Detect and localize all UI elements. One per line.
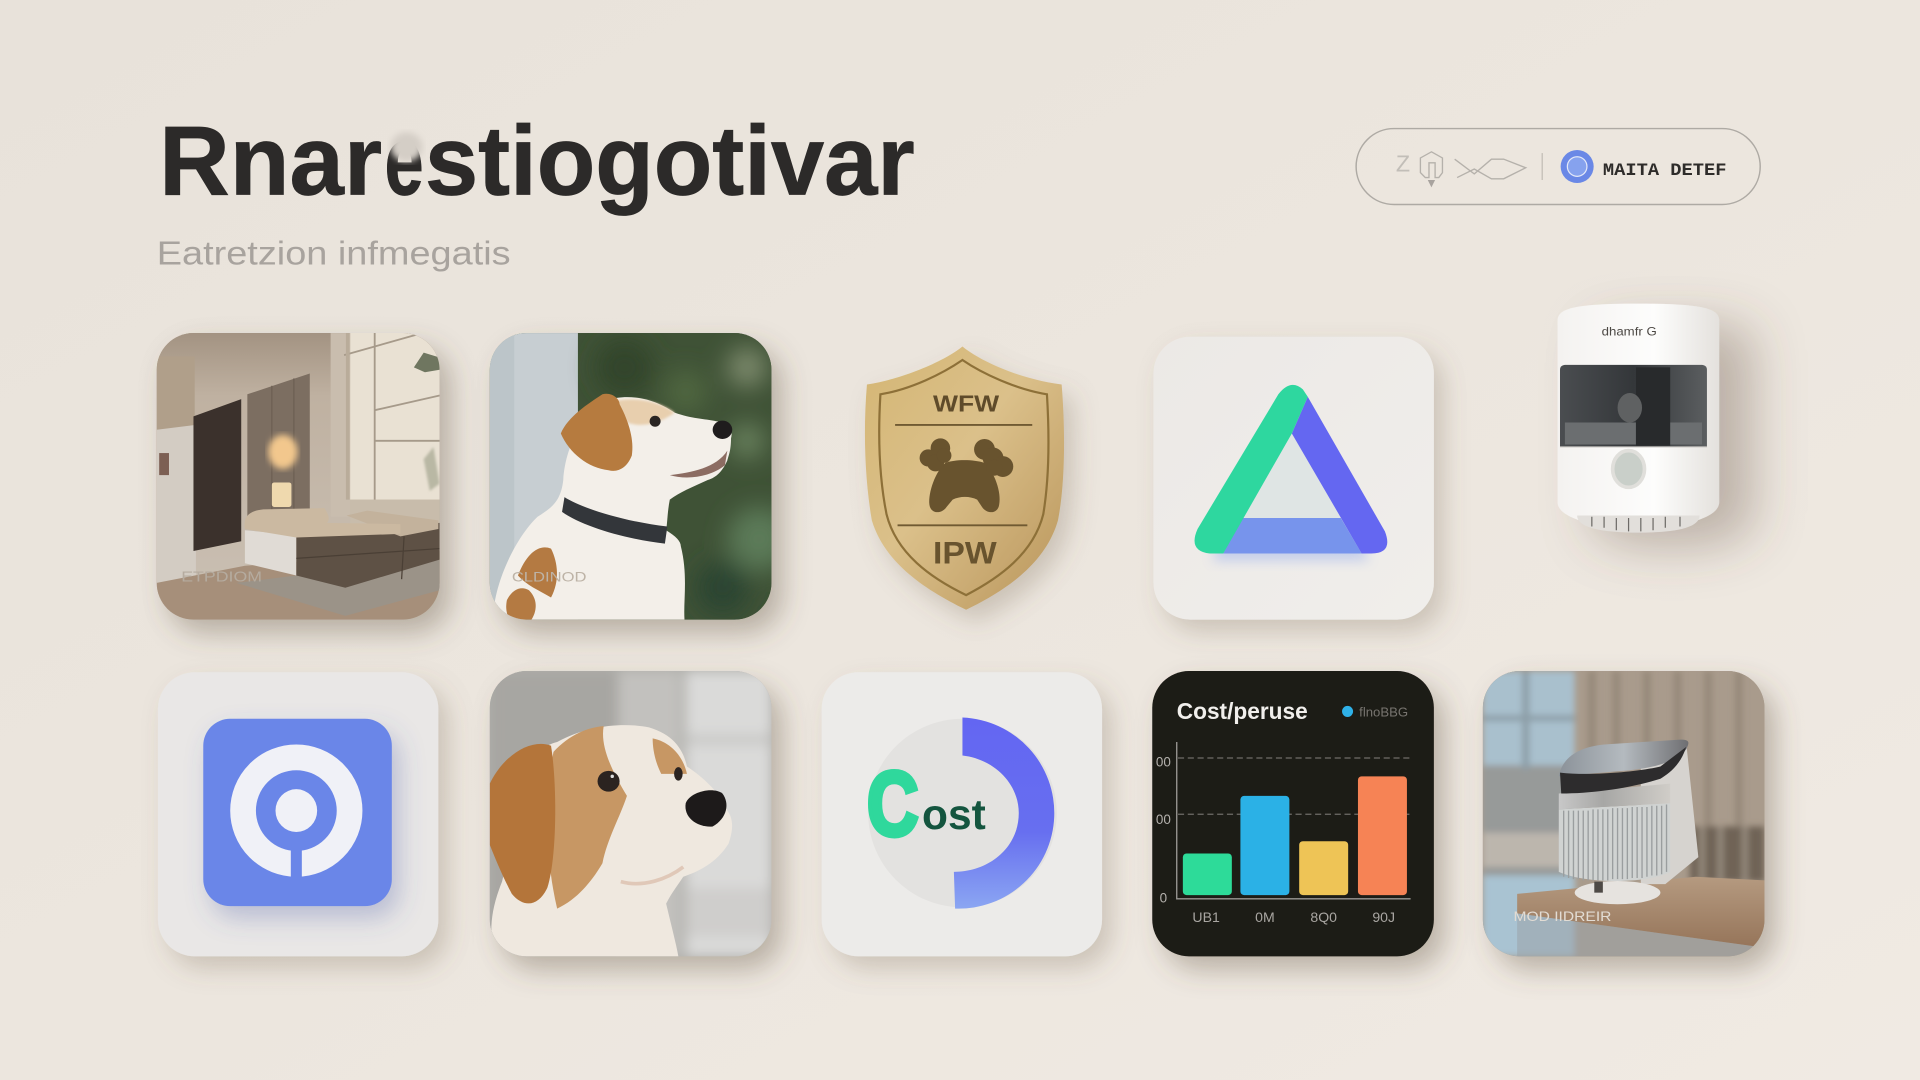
badge bottom text: IPW <box>933 534 998 570</box>
floor <box>157 551 441 620</box>
icon: faint line glyphs <box>1396 150 1526 187</box>
purifier back body <box>1641 742 1698 884</box>
cost wordmark <box>867 754 986 855</box>
y axis labels <box>1156 755 1171 905</box>
y axis labels: 0 <box>1160 890 1167 905</box>
panel: cost donut card <box>822 672 1102 956</box>
dog silhouette <box>491 725 732 956</box>
dog body <box>493 397 732 620</box>
speaker grill <box>1577 516 1700 533</box>
window <box>350 333 440 500</box>
title: e <box>384 106 424 216</box>
purifier dark band <box>1560 747 1686 793</box>
purifier glass cylinder <box>1559 803 1670 881</box>
photo caption: ETPDIOM <box>181 570 262 586</box>
bars <box>1183 776 1407 895</box>
cost wordmark: ost <box>922 791 986 839</box>
panel: white motion sensor camera <box>1558 304 1719 533</box>
badge top text: WFW <box>933 390 999 416</box>
y axis labels: 00 <box>1156 755 1171 770</box>
chart axes <box>1177 742 1411 899</box>
rug <box>238 560 440 616</box>
panel: interior photo <box>157 328 441 620</box>
chart title: Cost/peruse <box>1177 698 1308 724</box>
ear <box>561 394 632 471</box>
status pill <box>1356 129 1760 204</box>
ottoman <box>245 530 296 576</box>
x axis labels <box>1192 909 1395 925</box>
pill label: MAITA DETEF <box>1603 161 1727 181</box>
icon: triangle logo <box>1195 385 1387 561</box>
subtitle: Eatretzion infmegatis <box>157 235 511 272</box>
panel: dog looking up photo <box>490 333 791 620</box>
photo caption: MOD IIDREIR <box>1513 908 1611 924</box>
panel: air purifier photo <box>1483 671 1764 956</box>
title: stiogotivar <box>425 106 915 216</box>
dark wall panel <box>193 399 241 551</box>
legend: flnoBBG <box>1359 704 1408 719</box>
photo caption: CLDINOD <box>512 569 587 585</box>
panel: cost bar chart <box>1152 671 1434 956</box>
collar <box>562 497 667 544</box>
panel: blue location app card <box>158 672 438 956</box>
sensor lens <box>1613 451 1644 487</box>
cost wordmark: C <box>867 754 918 855</box>
title: Rnar <box>159 106 382 216</box>
donut chart <box>868 718 1057 909</box>
icon: faint line glyphs: Z <box>1396 150 1410 176</box>
x axis labels: UB1 <box>1192 909 1220 925</box>
title <box>159 106 915 216</box>
x axis labels: 0M <box>1255 909 1275 925</box>
icon: paw <box>920 438 1013 512</box>
panel: gold shield badge <box>865 347 1064 610</box>
icon: blue app tile <box>203 719 392 906</box>
tan face <box>547 726 627 909</box>
x axis labels: 8Q0 <box>1310 909 1337 925</box>
icon: blue status dot <box>1561 150 1594 183</box>
panel: triangle logo card <box>1153 337 1434 620</box>
table <box>1517 877 1764 947</box>
purifier dome <box>1559 740 1688 776</box>
sensor label: dhamfr G <box>1602 326 1657 339</box>
purifier silver band <box>1559 784 1670 809</box>
panel: puppy close-up photo <box>490 671 771 956</box>
x axis labels: 90J <box>1372 909 1395 925</box>
sensor window <box>1560 365 1707 447</box>
y axis labels: 00 <box>1156 812 1171 827</box>
